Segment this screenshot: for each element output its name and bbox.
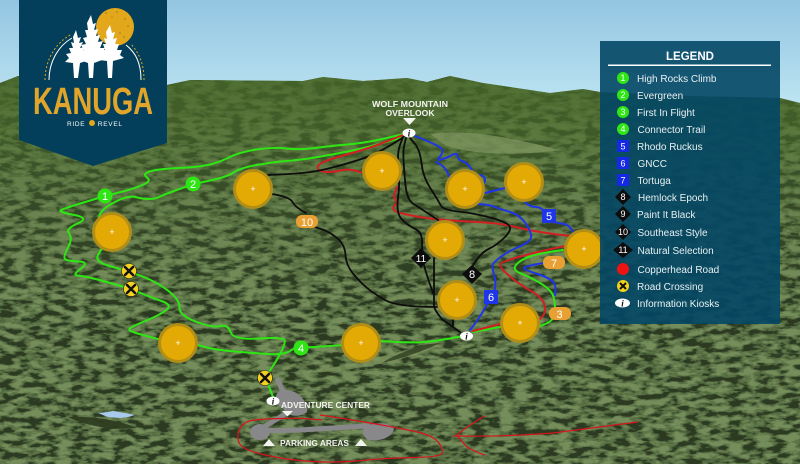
label: Parking Areas	[263, 439, 367, 448]
label: Wolf Mountain Overlook: WOLF MOUNTAIN	[372, 100, 448, 109]
legend labels: Tortuga	[638, 176, 671, 187]
gold map pins	[94, 152, 602, 362]
gold map pins: +	[517, 318, 523, 328]
adventure center and parking roads	[250, 378, 394, 441]
legend icons: 2	[620, 90, 626, 100]
lake	[98, 411, 135, 418]
trail badges: 4	[298, 343, 304, 355]
legend panel	[600, 41, 780, 324]
trail badges	[98, 176, 571, 356]
legend labels	[637, 74, 719, 310]
label: Adventure Center	[281, 401, 370, 416]
legend icons: i	[621, 298, 624, 308]
legend labels: High Rocks Climb	[637, 74, 717, 85]
trail badges: 11	[416, 254, 427, 265]
legend icons: 8	[620, 192, 626, 202]
gold map pins: +	[581, 244, 587, 254]
gold map pins: +	[521, 177, 527, 187]
legend labels: Paint It Black	[637, 210, 696, 221]
gold map pins: +	[454, 295, 460, 305]
icon: arcs	[49, 38, 141, 80]
legend icons: 10	[618, 227, 628, 237]
legend labels: Natural Selection	[638, 246, 714, 257]
legend labels: Copperhead Road	[638, 265, 719, 276]
icon: sun	[96, 8, 134, 46]
legend labels: Road Crossing	[637, 282, 703, 293]
icon: tagline star	[89, 120, 95, 126]
legend title: LEGEND	[666, 51, 714, 63]
legend labels: Evergreen	[637, 91, 683, 102]
logo banner	[19, 0, 167, 166]
label: Wolf Mountain Overlook: OVERLOOK	[386, 109, 435, 118]
legend labels: First In Flight	[637, 108, 695, 119]
logo tagline: RIDE REVEL	[67, 121, 122, 128]
label: Adventure Center: ADVENTURE CENTER	[281, 401, 370, 410]
trail badges: 2	[190, 179, 196, 191]
information kiosks: i	[465, 332, 468, 342]
legend icons	[613, 72, 633, 308]
trail badges: 10	[301, 217, 313, 229]
legend icons: 9	[620, 209, 626, 219]
information kiosks: i	[408, 128, 411, 138]
legend labels: Rhodo Ruckus	[637, 142, 703, 153]
trail badges: 5	[546, 211, 552, 223]
trail badges: 1	[102, 191, 108, 203]
gold map pins: +	[250, 184, 256, 194]
trail: red Copperhead Road	[318, 135, 572, 331]
icon: dashed arcs	[45, 34, 144, 80]
legend labels: Southeast Style	[638, 228, 708, 239]
gold map pins: +	[358, 338, 364, 348]
trail badges: 6	[488, 292, 494, 304]
trail badges: 8	[469, 269, 475, 281]
trail: blue routes	[415, 136, 573, 330]
sky background	[0, 0, 800, 110]
annotation: red hand-drawn circle	[238, 415, 443, 462]
legend icons: 4	[620, 124, 626, 134]
legend icons: 3	[620, 107, 626, 117]
gold map pins: +	[379, 166, 385, 176]
trail: green routes	[60, 134, 563, 397]
legend icons: 11	[618, 245, 628, 255]
label: Wolf Mountain Overlook	[372, 100, 448, 125]
legend icons: 5	[620, 142, 626, 152]
icon: pine trees	[65, 15, 124, 78]
logo wordmark: KANUGA	[33, 81, 153, 123]
trail badges: 3	[556, 309, 563, 321]
trail: black routes	[268, 136, 510, 332]
information kiosks: i	[272, 396, 275, 406]
legend labels: Information Kiosks	[637, 299, 719, 310]
legend icons: 1	[620, 73, 626, 83]
legend labels: Connector Trail	[638, 125, 705, 136]
trail badges: 7	[551, 258, 557, 270]
information kiosks	[266, 128, 473, 406]
legend icons: 6	[620, 158, 626, 168]
annotation: red arrow	[453, 416, 638, 455]
legend labels: GNCC	[638, 159, 667, 170]
legend labels: Hemlock Epoch	[638, 193, 708, 204]
legend icons: 7	[620, 176, 626, 186]
gold map pins: +	[109, 227, 115, 237]
road crossings	[122, 264, 272, 386]
label: Parking Areas: PARKING AREAS	[280, 439, 350, 448]
gold map pins: +	[442, 235, 448, 245]
gold map pins: +	[175, 338, 181, 348]
gold map pins: +	[462, 184, 468, 194]
